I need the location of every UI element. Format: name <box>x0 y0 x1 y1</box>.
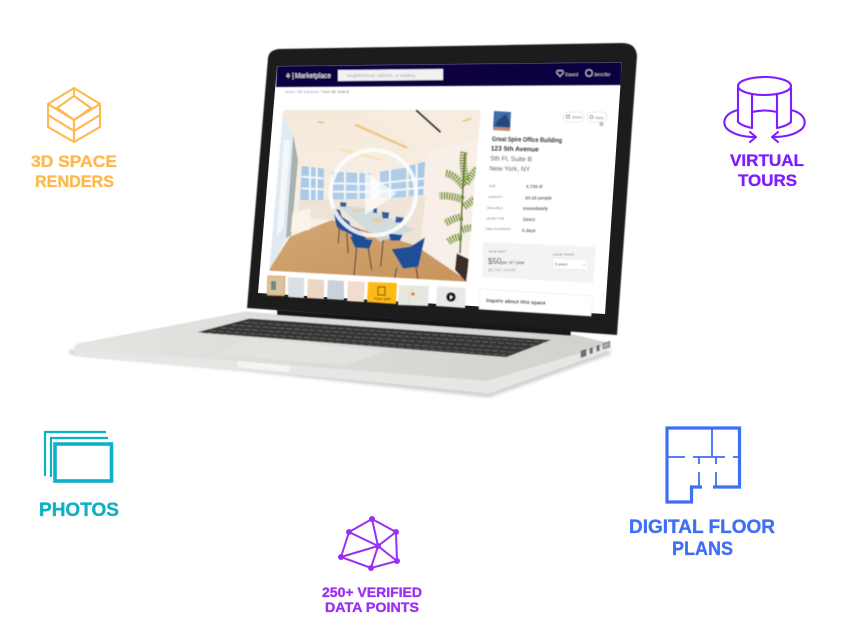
inquire card <box>479 289 593 316</box>
icon: rotating cylinder <box>724 77 805 142</box>
plant <box>439 152 478 242</box>
icon: floor plan <box>666 427 740 502</box>
table items <box>352 209 383 223</box>
search box <box>338 69 443 81</box>
listing facts table: 20-25 people <box>525 196 552 200</box>
laptop lid <box>247 43 637 335</box>
laptop base <box>74 310 612 392</box>
building title: 5th Fl, Suite B <box>491 155 533 163</box>
ceiling and walls <box>274 110 480 260</box>
building title: 123 5th Avenue <box>491 145 539 153</box>
inquire card: Inquire about this space <box>486 298 546 307</box>
rent panel: 5 years <box>555 262 568 266</box>
listing facts table: LEASE TYPE <box>486 216 504 220</box>
saved link: Saved <box>565 72 578 77</box>
icon: 3D wireframe box <box>48 88 100 142</box>
thumbnail 4 <box>327 280 344 300</box>
plant stem <box>460 153 465 253</box>
rent panel: LEASE TERMS <box>553 252 574 256</box>
chair legs <box>338 227 418 282</box>
window mullions <box>302 164 425 200</box>
label: 3D space renders: RENDERS <box>35 172 114 191</box>
user link <box>586 70 611 77</box>
thumbnail strip <box>267 276 466 308</box>
marketplace logo <box>285 71 331 80</box>
building title: Great Spire Office Building <box>492 136 562 144</box>
hinge <box>277 310 571 336</box>
side ports <box>581 341 610 358</box>
floor plan tab: Floor plan <box>374 297 391 301</box>
floor <box>267 220 473 285</box>
icon: stacked photos <box>45 432 112 481</box>
back windows <box>300 162 425 201</box>
listing facts table: Immediately <box>523 206 548 211</box>
listing facts table: AVAILABLE <box>487 206 503 210</box>
screen background <box>258 62 622 314</box>
label: verified data points: DATA POINTS <box>325 599 419 615</box>
listing facts table <box>485 184 552 233</box>
listing facts table: Direct <box>523 217 536 222</box>
front notch <box>237 361 290 372</box>
search placeholder: Neighborhood, address, or building <box>347 73 416 78</box>
laptop <box>70 43 637 395</box>
blue chairs <box>333 202 425 269</box>
marketplace logo: | <box>292 71 294 80</box>
ceiling light strips <box>318 111 471 159</box>
rent panel: $8,745 / month <box>488 268 517 272</box>
ceiling panel <box>360 111 481 153</box>
listing details <box>479 111 607 316</box>
saved link <box>557 70 578 77</box>
laptop base shadow <box>70 352 610 395</box>
listing facts table: CAPACITY <box>488 195 503 199</box>
glass table <box>337 205 415 242</box>
label: virtual tours: TOURS <box>738 171 797 190</box>
trackpad <box>217 338 385 365</box>
label: verified data points: 250+ VERIFIED <box>322 584 422 600</box>
listing facts table: 4,739 sf <box>526 184 543 189</box>
label: digital floor plans <box>629 517 775 560</box>
building logo <box>493 111 511 131</box>
marketplace logo: ⚘ <box>285 72 291 80</box>
rent panel: $50per sf / year <box>488 257 525 266</box>
label: virtual tours <box>730 151 804 190</box>
navigation bar <box>276 62 622 87</box>
thumbnail 1 <box>267 276 285 296</box>
map thumbnail <box>398 285 429 306</box>
label: virtual tours: VIRTUAL <box>730 151 804 170</box>
label: photos: PHOTOS <box>39 500 119 521</box>
label: digital floor plans: PLANS <box>672 539 733 560</box>
label: 3D space renders: 3D SPACE <box>31 152 117 171</box>
thumbnail 3 <box>307 279 324 299</box>
feature: verified data points <box>322 516 422 615</box>
save button: Save <box>595 116 604 120</box>
base front edge <box>74 344 612 392</box>
base top deck <box>74 311 612 381</box>
save button <box>587 112 607 126</box>
floor plan tab <box>367 282 397 304</box>
building title <box>489 136 562 174</box>
play button <box>331 150 416 235</box>
label: 3D space renders <box>31 152 117 191</box>
feature: 3D space renders <box>31 88 117 191</box>
keyboard <box>197 319 551 357</box>
label: digital floor plans: DIGITAL FLOOR <box>629 517 775 538</box>
label: verified data points <box>322 584 422 615</box>
sideboard <box>291 208 311 232</box>
lower back wall <box>297 197 426 247</box>
feature: digital floor plans <box>629 427 775 560</box>
feature: photos <box>39 432 119 521</box>
rent panel <box>482 242 596 283</box>
thumbnail 2 <box>288 277 304 298</box>
thumbnail 5 <box>347 281 365 302</box>
marketplace logo: Marketplace <box>295 71 331 80</box>
breadcrumb: Home / 5th & Avenue / Floor 5B, Suite B <box>285 90 350 94</box>
listing facts table: SIZE <box>489 184 496 188</box>
main photo <box>267 107 483 285</box>
right wall <box>422 138 478 277</box>
video thumbnail <box>436 286 466 308</box>
plant pot <box>455 253 469 282</box>
user link: Jennifer <box>594 72 611 77</box>
share button <box>563 112 584 122</box>
building title: New York, NY <box>489 165 531 173</box>
rent panel: BASE RENT <box>489 250 506 254</box>
icon: network graph <box>338 516 400 571</box>
feature: virtual tours <box>724 77 805 190</box>
share button: Share <box>572 116 582 120</box>
listing facts table: TIME ON MARKET <box>485 227 511 231</box>
listing facts table: 6 days <box>522 228 536 233</box>
screen <box>258 62 622 316</box>
left glass wall <box>268 112 294 272</box>
